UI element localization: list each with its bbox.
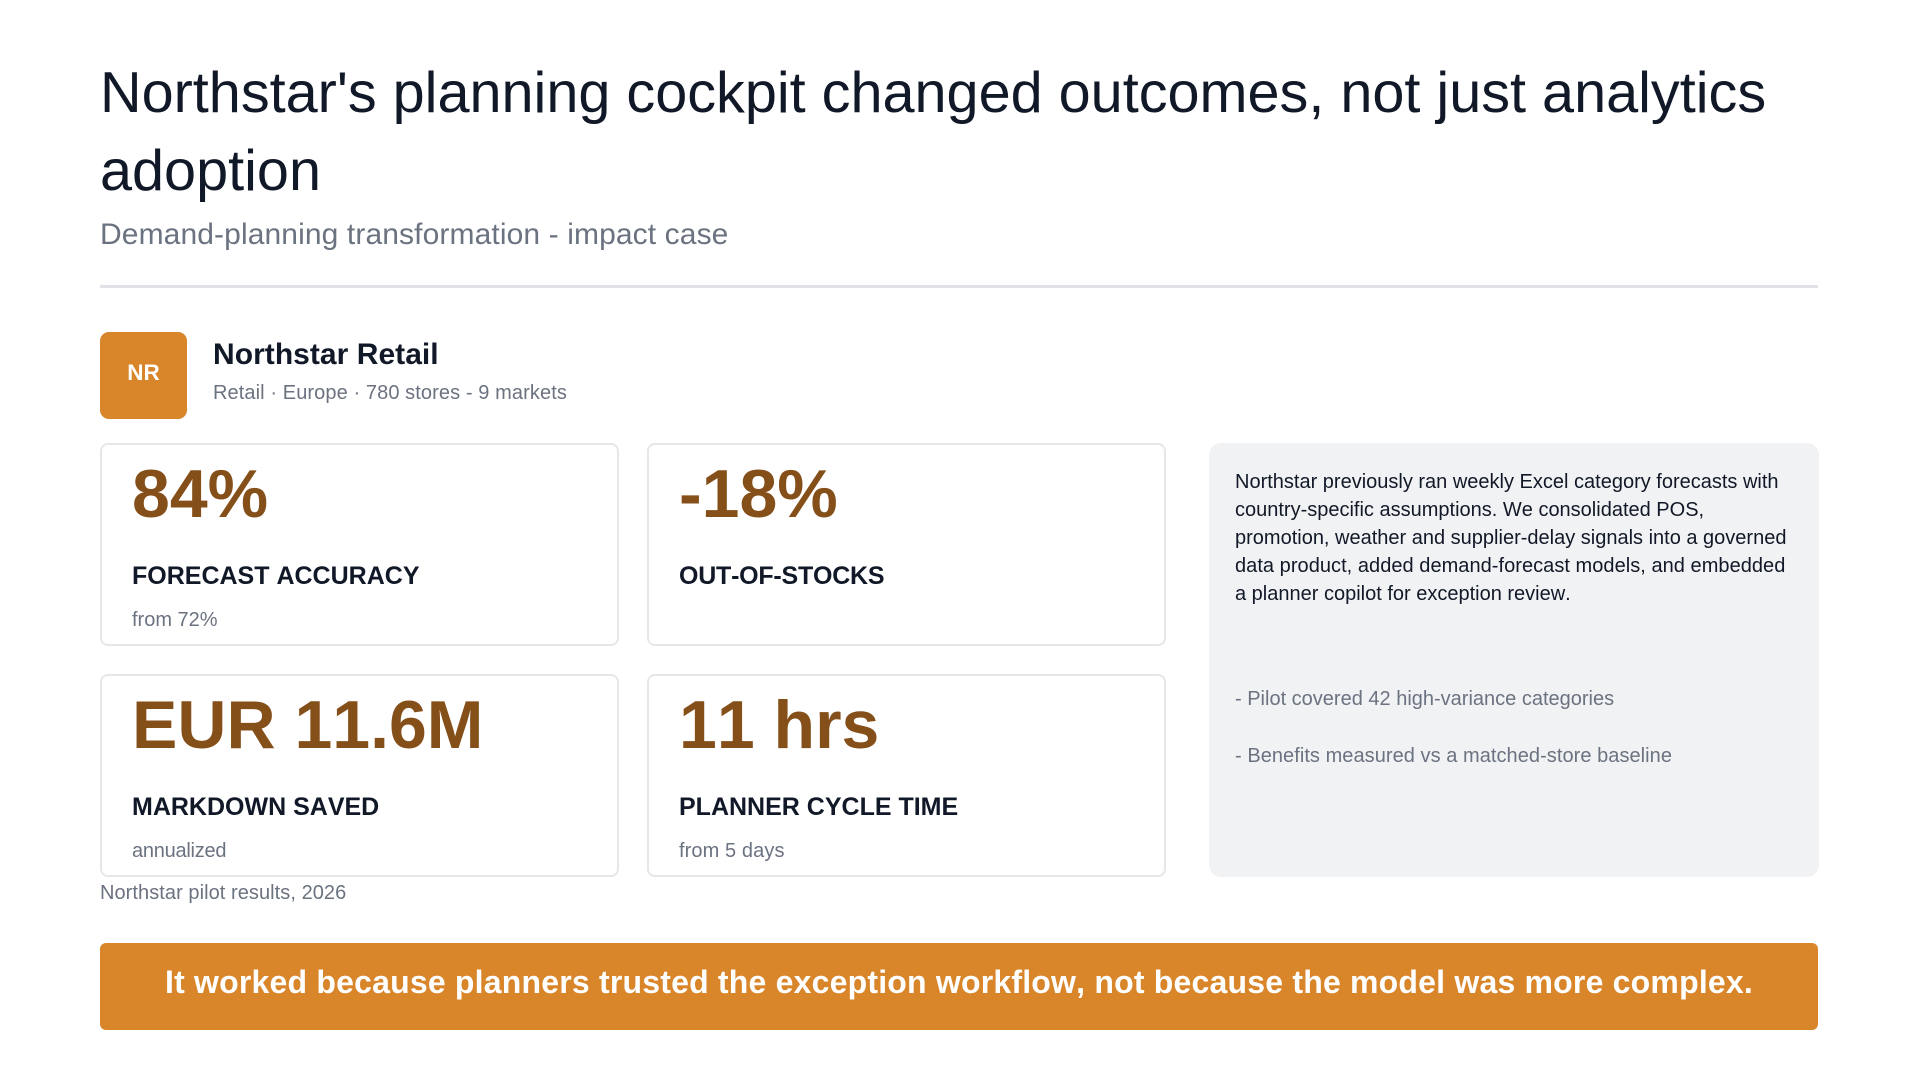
KPI card: markdown saved (100, 674, 619, 877)
label: OUT-OF-STOCKS (679, 562, 884, 590)
KPI card: planner cycle time (647, 674, 1166, 877)
context description (1235, 471, 1786, 605)
label: FORECAST ACCURACY (132, 562, 420, 590)
header divider (100, 285, 1818, 288)
note: from 72% (132, 609, 218, 631)
title: Northstar's planning cockpit changed outcomes, not just analytics adoption (100, 61, 1766, 203)
panel: context (1209, 443, 1819, 877)
context description: Northstar previously ran weekly Excel category forecasts with (1235, 471, 1779, 493)
takeaway banner (100, 943, 1818, 1030)
value: 11 hrs (679, 686, 879, 762)
KPI card: forecast accuracy (100, 443, 619, 646)
takeaway banner: It worked because planners trusted the exception workflow, not because the model was more complex. (165, 964, 1753, 1000)
company name: Northstar Retail (213, 338, 439, 371)
bullet: pilot scope: - Pilot covered 42 high-variance categories (1235, 688, 1614, 710)
company logo badge (100, 332, 187, 419)
company logo badge: NR (127, 360, 160, 385)
label: MARKDOWN SAVED (132, 793, 379, 821)
value: 84% (132, 456, 268, 532)
label: PLANNER CYCLE TIME (679, 793, 958, 821)
context description: a planner copilot for exception review. (1235, 583, 1571, 605)
note: annualized (132, 840, 226, 862)
context description: data product, added demand-forecast models, and embedded (1235, 555, 1785, 577)
bullet: measurement: - Benefits measured vs a matched-store baseline (1235, 745, 1672, 767)
value: EUR 11.6M (132, 686, 483, 762)
value: -18% (679, 456, 838, 532)
note: from 5 days (679, 840, 785, 862)
source note: Northstar pilot results, 2026 (100, 882, 346, 904)
context description: country-specific assumptions. We consolidated POS, (1235, 499, 1704, 521)
subtitle: Demand-planning transformation - impact case (100, 218, 728, 251)
company details: Retail · Europe · 780 stores - 9 markets (213, 382, 567, 404)
context description: promotion, weather and supplier-delay signals into a governed (1235, 527, 1786, 549)
KPI card: out-of-stocks (647, 443, 1166, 646)
